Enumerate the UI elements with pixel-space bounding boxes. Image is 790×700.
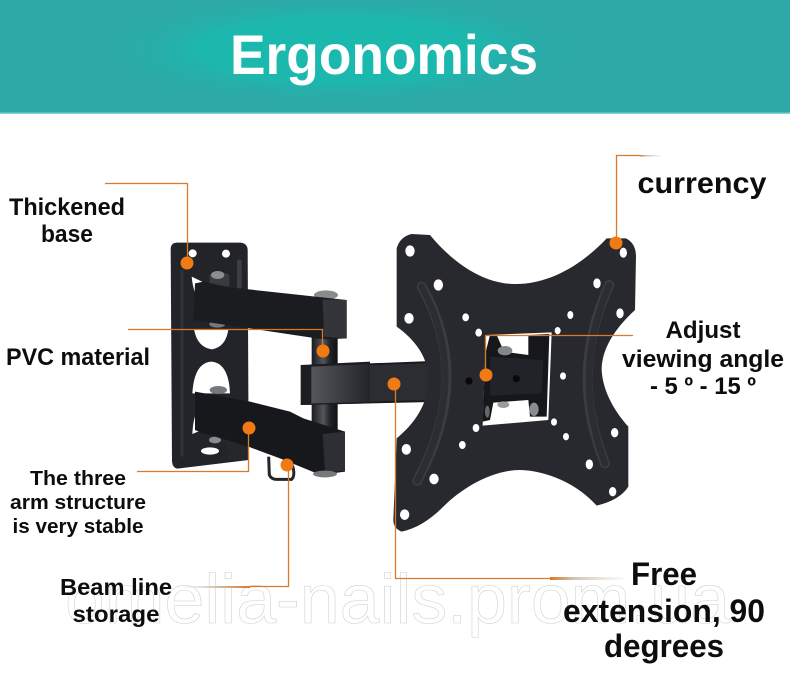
callout: three arm structure: arm structure bbox=[10, 492, 146, 514]
callout: thickened base: base bbox=[41, 221, 93, 248]
callout: adjust viewing angle: Adjust bbox=[666, 317, 740, 344]
callout: three arm structure: is very stable bbox=[12, 516, 144, 538]
title: Ergonomics bbox=[230, 23, 538, 86]
rail channels bbox=[417, 287, 446, 481]
watermark: omelia-nails.prom.ua bbox=[65, 560, 730, 638]
middle arm hub bbox=[301, 362, 370, 405]
wall plate bbox=[171, 243, 249, 469]
callout: beam line storage bbox=[60, 458, 294, 627]
mounting holes bbox=[400, 245, 627, 520]
callout: free extension: degrees bbox=[604, 628, 724, 664]
callout: three arm structure bbox=[10, 422, 256, 538]
lower bolt bbox=[210, 386, 227, 394]
callout: PVC material: PVC material bbox=[6, 344, 150, 371]
wire loop bbox=[269, 457, 294, 479]
callout: adjust viewing angle: - 5 º - 15 º bbox=[650, 373, 756, 400]
callout: adjust viewing angle: viewing angle bbox=[622, 346, 784, 373]
callout: thickened base: Thickened bbox=[9, 194, 125, 221]
lower arm bbox=[195, 392, 345, 475]
callout: beam line storage: storage bbox=[72, 601, 160, 627]
callout: three arm structure: The three bbox=[30, 468, 126, 490]
header band bbox=[0, 0, 790, 114]
middle arm bbox=[301, 361, 432, 405]
callout: PVC material bbox=[6, 330, 330, 371]
callout: beam line storage: Beam line bbox=[60, 574, 172, 600]
callout: adjust viewing angle bbox=[480, 317, 784, 400]
plate body bbox=[393, 234, 636, 532]
centre window bbox=[483, 332, 552, 426]
callout: thickened base bbox=[9, 184, 194, 270]
pivot post bbox=[312, 337, 338, 433]
callout: free extension: Free bbox=[631, 556, 697, 592]
plate rib bbox=[232, 262, 246, 287]
wall plate holes bbox=[189, 249, 230, 455]
tilt mechanism bbox=[483, 334, 549, 422]
callout: free extension bbox=[388, 378, 765, 664]
upper arm bbox=[193, 282, 347, 339]
callout: currency bbox=[610, 155, 767, 250]
callout: currency: currency bbox=[638, 167, 767, 200]
wall bracket and arms bbox=[171, 243, 370, 479]
callout: free extension: extension, 90 bbox=[563, 593, 765, 629]
upper bolts bbox=[209, 272, 229, 287]
VESA mounting plate bbox=[393, 234, 636, 532]
